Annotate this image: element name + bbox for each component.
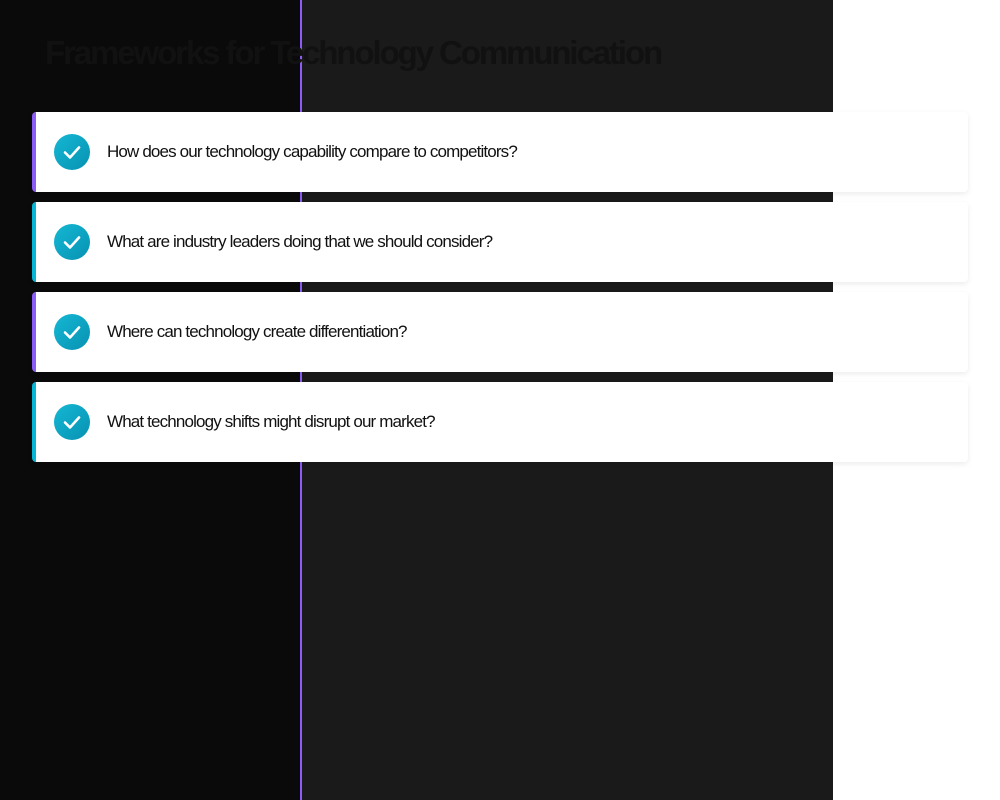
- card 1: [32, 112, 968, 192]
- icon: check: [54, 224, 90, 260]
- question text: What are industry leaders doing that we should consider?: [107, 232, 492, 251]
- question text: Where can technology create differentiation?: [107, 322, 407, 341]
- question text: How does our technology capability compare to competitors?: [107, 142, 517, 161]
- icon: check: [54, 314, 90, 350]
- question text: What technology shifts might disrupt our market?: [107, 412, 435, 431]
- icon: check: [54, 134, 90, 170]
- card 3: [32, 292, 968, 372]
- icon: check: [54, 404, 90, 440]
- title: Frameworks for Technology Communication: [45, 34, 661, 71]
- card 2: [32, 202, 968, 282]
- card 4: [32, 382, 968, 462]
